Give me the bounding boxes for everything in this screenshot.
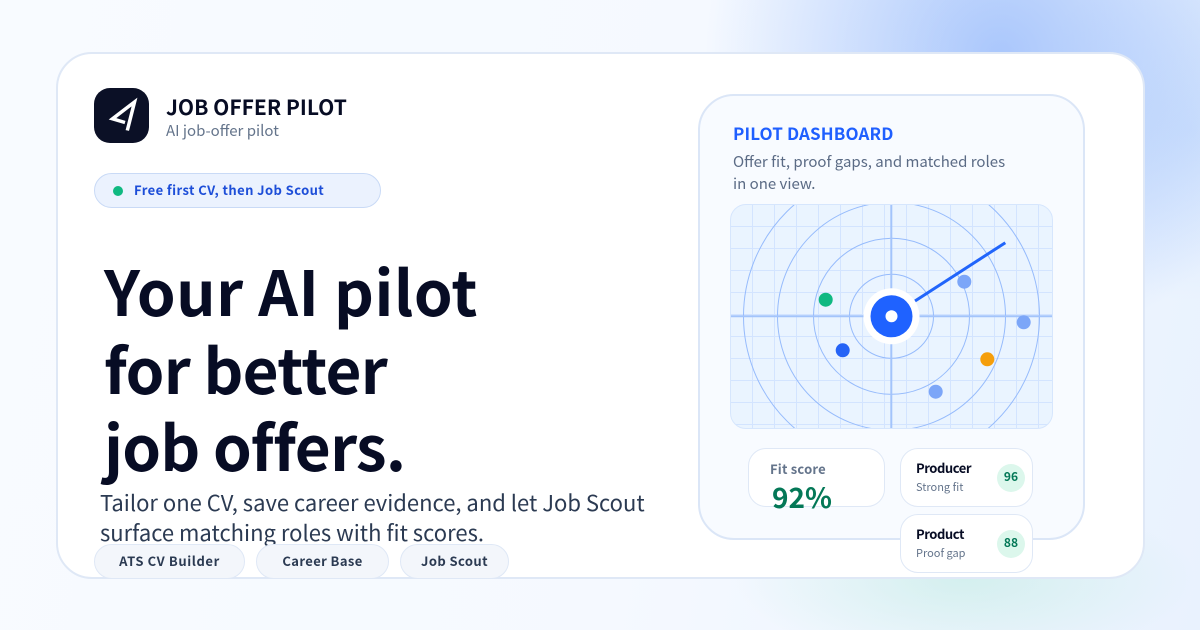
pill: Job Scout [400, 544, 509, 579]
description [100, 486, 645, 548]
dashboard description [733, 151, 1005, 194]
pill: ATS CV Builder [94, 544, 245, 579]
score badge [997, 464, 1025, 492]
dashboard description: in one view. [733, 173, 815, 194]
brand tagline: AI job-offer pilot [166, 120, 279, 141]
card: product [900, 514, 1033, 573]
role name: Product [916, 524, 964, 543]
score badge: 88 [1004, 534, 1018, 551]
headline: job offers. [104, 399, 405, 489]
dashboard heading: PILOT DASHBOARD [733, 120, 894, 145]
score badge: 96 [1004, 468, 1018, 485]
fit score value: 92% [772, 477, 832, 517]
feature pills [94, 544, 509, 578]
card: fit score [748, 448, 885, 507]
badge dot [113, 186, 123, 196]
center hub [864, 288, 920, 344]
radar rings [744, 168, 1040, 464]
panel: pilot dashboard [698, 94, 1085, 540]
headline: for better [104, 322, 387, 412]
icon: logo [94, 88, 149, 143]
badge: free first CV [94, 173, 381, 208]
headline: Your AI pilot [104, 244, 478, 334]
pill: Job Scout: Job Scout [421, 551, 488, 570]
pill: Career Base [256, 544, 389, 579]
radar crosshair [730, 204, 1053, 429]
needle [915, 243, 1005, 301]
radar chart [730, 204, 1053, 429]
data dots [819, 275, 1031, 399]
role name: Producer [916, 458, 971, 477]
score badge [997, 530, 1025, 558]
main card [56, 52, 1145, 579]
dashboard description: Offer fit, proof gaps, and matched roles [733, 151, 1005, 172]
pill: Career Base: Career Base [282, 551, 363, 570]
card: producer [900, 448, 1033, 507]
description: Tailor one CV, save career evidence, and let Job Scout [100, 486, 645, 518]
headline [100, 244, 478, 489]
pill: ATS CV Builder: ATS CV Builder [119, 551, 220, 570]
badge text: Free first CV, then Job Scout [134, 180, 324, 199]
description: surface matching roles with fit scores. [100, 516, 484, 548]
brand name: JOB OFFER PILOT [166, 92, 347, 122]
role note: Strong fit [916, 479, 963, 495]
fit score label: Fit score [770, 459, 826, 478]
role note: Proof gap [916, 545, 966, 561]
